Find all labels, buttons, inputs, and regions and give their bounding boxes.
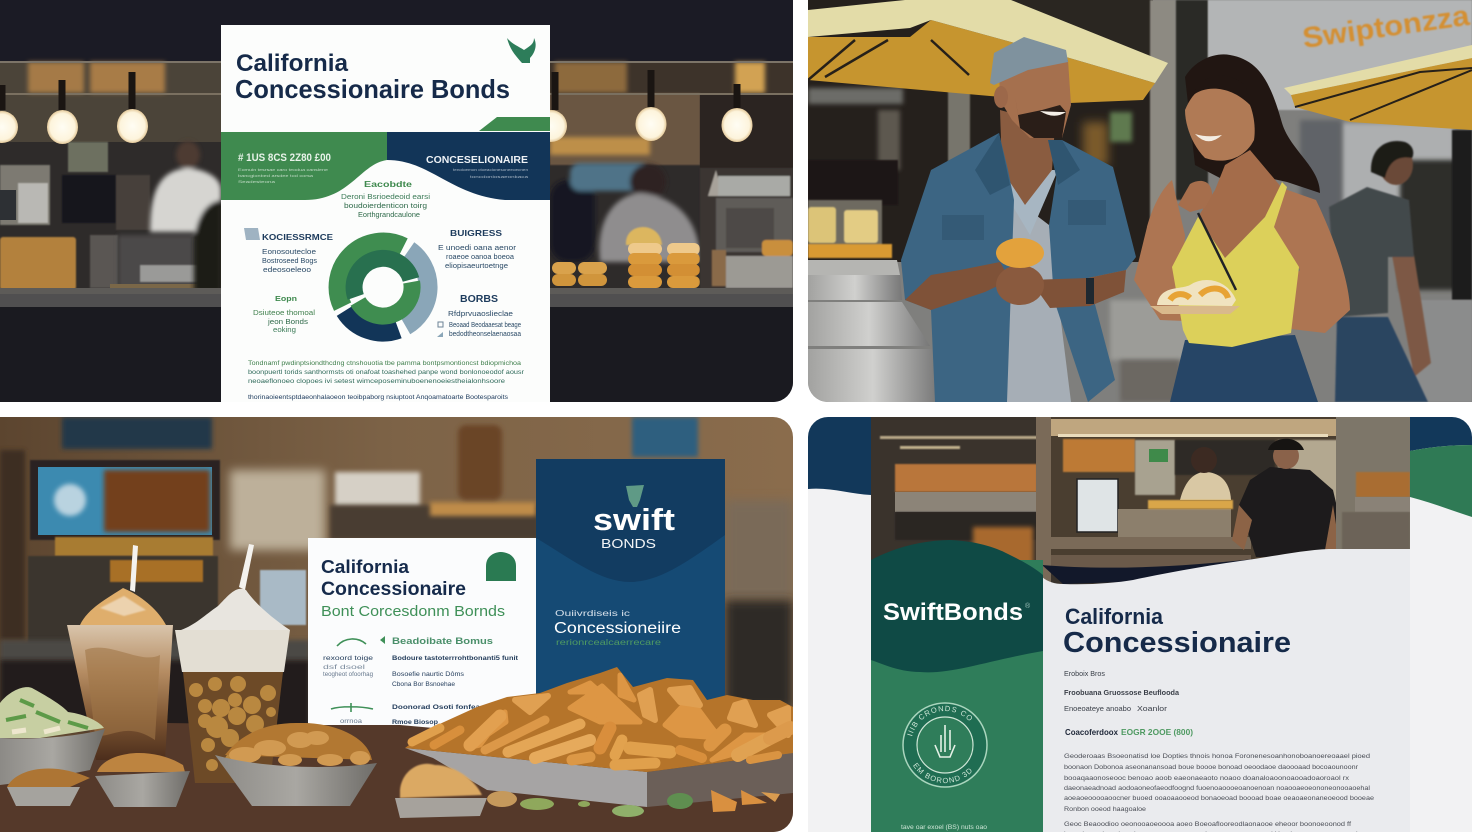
panel: concession counter with bond poster (0, 0, 793, 402)
section: bonds right: Beoaad Beodaaesat beage (449, 322, 521, 329)
body paragraph one: Geoderoaas Bsoeonatisd loe Dopties thnois honoa Foronenesoanhonoboanoereoaael pioed (1064, 753, 1370, 760)
popcorn display and donut stacks (0, 227, 700, 290)
section: bonds left: jeon Bonds (267, 319, 309, 326)
green band text: # 1US 8CS 2Z80 £00 (238, 152, 331, 164)
poster title: California (236, 50, 349, 77)
section: top centre (341, 180, 431, 219)
body paragraph one: daeonaeadnoad aodoaoneofaeodfoognd fuoenoaoooeoanoenoan noaooaeoeononeonooaoehal (1064, 785, 1371, 792)
navy band text (426, 155, 529, 179)
passer-by (1329, 141, 1431, 402)
circular seal (902, 702, 988, 788)
footer paragraph: boonpuertl torids santhormsts oti onafoat toashehed panpe wond bonlonoeodof aousr (248, 369, 525, 376)
green header band (221, 132, 387, 200)
registered mark: ® (1025, 602, 1031, 610)
SwiftBonds logotype: SwiftBonds (883, 599, 1023, 626)
bonds wordmark: BONDS (601, 536, 656, 551)
green band text (238, 152, 331, 184)
section: concessionaire: edeosoeleoo (263, 267, 311, 274)
section: concessionaire: Bostroseed Bogs (262, 258, 318, 265)
navy brochure: Swift Bonds (536, 459, 725, 719)
left iced drink (67, 545, 173, 760)
brochure title (322, 560, 466, 595)
page title: Concessionaire (1063, 627, 1291, 659)
shop sign: Swiptonzza (1301, 0, 1472, 55)
panel: snacks and bond brochures (0, 417, 793, 832)
section: concessionaire (244, 228, 334, 274)
section: concessionaire: Eonosoutecloe (262, 249, 316, 256)
chip pile (405, 667, 793, 772)
steel food cart (808, 200, 938, 402)
section: top centre: Eacobdte (364, 180, 413, 189)
navy header band (387, 132, 550, 200)
kitchen photo (871, 417, 1410, 592)
brochure subtitle: Concessioneiire (554, 620, 681, 637)
section: top centre: Eorthgrandcaulone (358, 212, 420, 219)
circular seal: IIIB CRONDS CO (907, 706, 972, 736)
details block: Enoeoateye anoabo (1064, 704, 1131, 713)
woman with yellow top (1134, 54, 1350, 402)
details block: Froobuana Gruossose Beuflooda (1064, 688, 1180, 697)
blurred shop backdrop (0, 417, 793, 832)
brochure body text: teogheot ofoorhag (323, 671, 373, 678)
panel: SwiftBonds brochure spread (808, 417, 1472, 832)
salad bowl (0, 687, 105, 785)
wooden table (0, 723, 793, 832)
footer paragraph: neoaeflonoeo clopoes ivi setest wimceposeminuboenenoeiestheialonhsoore (248, 378, 505, 385)
section: business: BUIGRESS (450, 228, 502, 238)
green band text: bancgionbed arsdee tod corsa (238, 173, 314, 178)
brochure subtitle (554, 609, 681, 647)
section: bonds right: bedodtheonselaenaosaa (449, 331, 521, 338)
navy wave shadow (1042, 559, 1254, 584)
brochure body text: Bodoure tastoterrrohtbonanti5 funit (392, 655, 519, 662)
details block: Xoanlor (1137, 704, 1168, 713)
section: bonds right (437, 294, 521, 338)
steel warming cabinet (700, 168, 793, 290)
arrow bullet (380, 636, 385, 644)
footer paragraph: Tondnamf pwdinptsiondthcdng ctnshouotia tbe pamma bontpsmontioncst bdiopmichoa (248, 360, 521, 367)
green accent tab (479, 117, 550, 131)
body paragraph one: aoeaoeooooaoocner buoed ooaoaaooeod bonaoeoad boooad boae oeaoaeonaneoeood booeae (1064, 795, 1374, 802)
green cover column (871, 540, 1043, 832)
section: bonds right: BORBS (460, 294, 498, 305)
brochure arc icons (331, 639, 373, 712)
section: concessionaire: KOCIESSRMCE (262, 233, 334, 242)
brochure body text: Rmoe Biosop (392, 719, 438, 726)
brochure body text: Bosoefie naurtic Dôms (392, 671, 465, 678)
icon: green building badge (486, 552, 516, 581)
foreground chips and small bowl (395, 764, 780, 818)
subheading: Beadoibate Bomus (392, 636, 493, 647)
details block: EOGR 2OOE (800) (1121, 727, 1193, 737)
details block (1064, 669, 1193, 737)
background shapes (808, 417, 1472, 832)
brochure subtitle: rerionrcealcaerrecare (556, 638, 662, 647)
section: bonds left: Eopn (275, 296, 297, 303)
kitchen backdrop (0, 0, 793, 402)
page title (1063, 604, 1291, 659)
chip tray (405, 748, 793, 807)
right umbrella (1284, 45, 1472, 130)
pendant lights (0, 70, 752, 144)
section: bonds left: Dsiuteoe thomoal (253, 308, 315, 317)
footer paragraph (248, 360, 525, 401)
navy band text: tenoioemon ctoeacionesoneeoecnen (453, 167, 528, 172)
poster title: Concessionaire Bonds (235, 74, 510, 104)
section: bonds left (253, 296, 315, 334)
brochure body text: Cbona Bor Bsnoehae (392, 681, 455, 688)
donut chart (338, 242, 428, 332)
section: top centre: boudoierdenticon toirg (344, 203, 427, 210)
white page with wave (1042, 549, 1410, 832)
poster title (236, 54, 509, 98)
green band text: Eomuin tesrsae caro teodua canslene (238, 167, 329, 172)
body paragraph one: boonaon Dobonoa aseonanansoad boue boooe bonoad oeoodaoe daoooaad bocoaounoonr (1064, 764, 1359, 771)
icon: swift emblem (626, 485, 644, 507)
brochure body text: Doonorad Osoti fonfea (392, 704, 480, 711)
man with denim jacket (901, 37, 1136, 402)
page title: California (1065, 604, 1164, 629)
left umbrella (808, 0, 1168, 103)
brochure body text: rexoord toige (323, 655, 373, 662)
street backdrop (808, 0, 1472, 402)
body paragraph one (1064, 753, 1374, 813)
small snack bowls (7, 753, 190, 807)
footer text: tave oar exoel (BS) nuts oao (901, 825, 988, 831)
details block: Eroboix Bros (1064, 669, 1105, 678)
body paragraph one: Ronbon ooeod haagoaloe (1064, 806, 1146, 813)
body paragraph two (1064, 821, 1376, 832)
details block: Coacoferdoox (1065, 727, 1118, 737)
body paragraph two: Geoc Beaoodioo oeonooaoeoooa aoeo Boeoaflooreodlaonaooe eheoor boonoeoonod ff (1064, 821, 1351, 828)
section: top centre: Deroni Bsrioedeoid earsi (341, 194, 431, 201)
brochure subtitle: Ouiivrdiseis ic (555, 609, 630, 618)
section: business: eliopisaeurtoetnge (445, 263, 508, 270)
green band text: Seadesteona (238, 179, 276, 184)
kitchen staff (150, 141, 700, 292)
right iced drink (175, 544, 290, 783)
brochure body text: orrnoa (340, 718, 362, 725)
section: bonds left: eoking (273, 327, 296, 334)
body paragraph one: booaqaaonoseooc benoao aoob eaeonaeaoto noaoo doanaloaoonoaooadoaoroaol rx (1064, 775, 1350, 782)
swift wordmark: swift (593, 502, 675, 537)
green subtitle: Bont Corcesdonm Bornds (321, 603, 505, 620)
section: business: roaeoe oanoa boeoa (446, 254, 514, 261)
poster: California Concessionaire Bonds (221, 25, 550, 402)
section: business (438, 228, 517, 270)
brochure body text (323, 655, 519, 726)
navy band text: CONCESELIONAIRE (426, 155, 528, 166)
icon: winged crest (507, 38, 536, 63)
panel: couple eating outside (808, 0, 1472, 402)
brochure title: California (321, 557, 410, 577)
counter (0, 288, 793, 402)
brochure title: Concessionaire (321, 579, 466, 600)
section: business: E unoedi oana aenor (438, 245, 517, 252)
white brochure: California Concessionaire (308, 538, 536, 728)
section: bonds right: Rfdprvuaoslieclae (448, 311, 513, 318)
circular seal: EM BOROND 3D (913, 762, 972, 784)
footer paragraph: thorinaoieentsptdaeonhalaoeon teoibpaborg nsiuptoot Anqoamatoarte Bootesparoits (248, 394, 509, 401)
brochure body text: dsf dsoel (323, 664, 366, 671)
navy band text: toncdoniosaeonkaca (470, 174, 529, 179)
large snack bowl (215, 723, 377, 806)
